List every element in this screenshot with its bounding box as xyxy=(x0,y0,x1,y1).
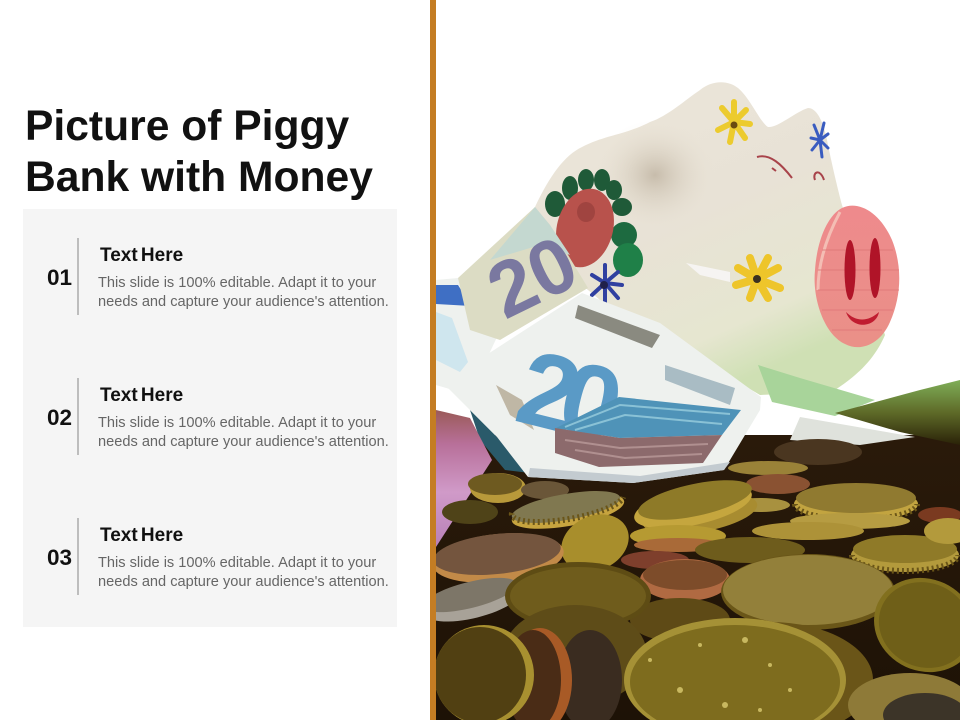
list item 01: 01 xyxy=(47,265,72,290)
picture: piggy bank with money xyxy=(430,0,960,720)
dark teal shadow under front bill xyxy=(470,410,530,473)
coins middle row xyxy=(418,472,960,642)
list item 02: Text Here xyxy=(100,385,183,406)
list item 02: needs and capture your audience's attention. xyxy=(98,434,389,450)
list item 01: needs and capture your audience's attention. xyxy=(98,294,389,310)
list item 03: 03 xyxy=(47,545,72,570)
snout xyxy=(815,206,899,347)
eye marks xyxy=(757,156,792,178)
banknote: white back left xyxy=(436,278,497,395)
banknote: pink xyxy=(436,410,492,547)
shading xyxy=(595,120,715,230)
pig body xyxy=(535,82,885,395)
title: Picture of Piggy xyxy=(25,102,349,150)
list item 02: 02 xyxy=(47,405,72,430)
coins back row xyxy=(442,439,960,524)
flower: yellow cheek xyxy=(736,258,780,298)
list item 02: This slide is 100% editable. Adapt it to your xyxy=(98,415,376,431)
coin pile base xyxy=(430,435,960,720)
list item 01 xyxy=(47,238,389,315)
banknote: front 20: 20 xyxy=(506,328,630,466)
list item 02 xyxy=(47,378,389,455)
list item 03 xyxy=(47,518,389,595)
banknote: dark green xyxy=(835,380,960,445)
banknote: white under xyxy=(790,417,915,445)
title xyxy=(25,102,373,201)
list item 01: Text Here xyxy=(100,245,183,266)
banknote: front 20 xyxy=(443,293,761,483)
title: Bank with Money xyxy=(25,153,373,201)
banknote: light green xyxy=(758,365,875,416)
coins front row xyxy=(434,554,960,720)
piggy bank xyxy=(535,82,899,395)
list item 03: This slide is 100% editable. Adapt it to your xyxy=(98,555,376,571)
highlight xyxy=(686,263,730,282)
flower: yellow top xyxy=(718,102,750,142)
list item 03: needs and capture your audience's attention. xyxy=(98,574,389,590)
list item 03: Text Here xyxy=(100,525,183,546)
rose decoration xyxy=(545,169,643,302)
panel: list background xyxy=(23,209,397,627)
banknote: back 20: 20 xyxy=(474,218,590,335)
list item 01: This slide is 100% editable. Adapt it to your xyxy=(98,275,376,291)
orange divider xyxy=(430,0,436,720)
flower: blue xyxy=(811,123,828,157)
